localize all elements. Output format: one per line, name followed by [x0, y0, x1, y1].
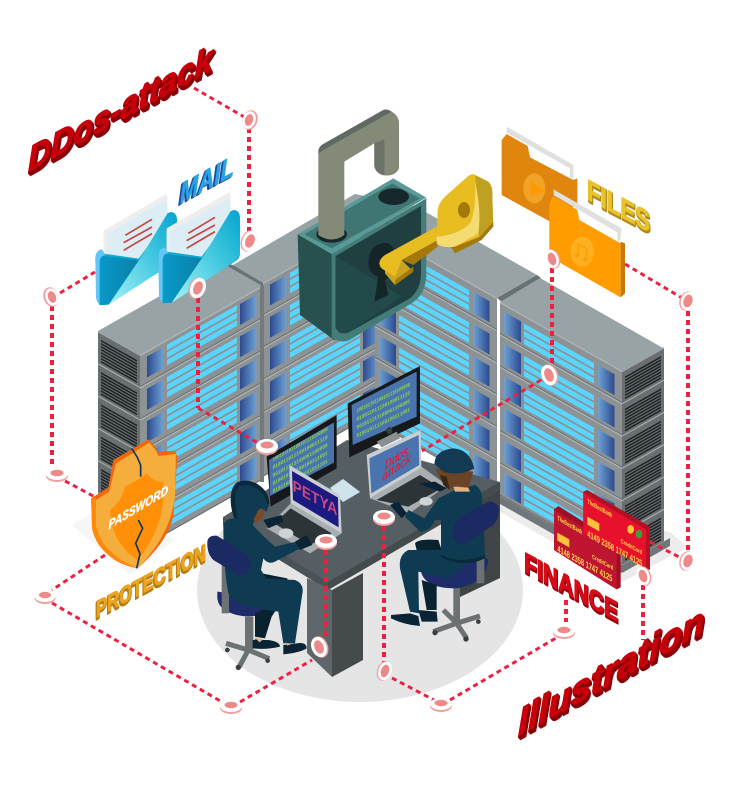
gloves and shoes [253, 515, 312, 654]
rack D [497, 275, 670, 573]
monitor left: 010011011100100011110 [273, 434, 328, 471]
padlock left face [298, 234, 335, 341]
card back [554, 506, 621, 589]
laptop PETYA [267, 465, 342, 553]
chair right seat and base [421, 555, 488, 642]
gloves [390, 482, 447, 518]
padlock top [298, 178, 426, 254]
laptop PETYA: PETYA [293, 476, 337, 519]
dotted connectors [52, 88, 688, 702]
face [253, 509, 265, 523]
chair back right [453, 502, 499, 544]
label: FILES: FILES [587, 173, 650, 239]
ankles [255, 638, 292, 646]
monitor left: 010110011010011011101 [273, 458, 328, 495]
label: MAIL: MAIL [180, 149, 234, 211]
neck [453, 487, 470, 492]
pin faces [34, 109, 698, 712]
torso right [405, 485, 485, 564]
desk right pillar [455, 482, 500, 597]
shield cracks [132, 448, 143, 568]
label: PROTECTION: PROTECTION [96, 539, 206, 624]
hacker right with chair [390, 448, 499, 642]
front leg [400, 550, 468, 613]
floor: grey ellipse [197, 478, 523, 702]
monitor left [267, 415, 337, 507]
connector pins [34, 108, 698, 714]
rack C [355, 194, 537, 492]
pin rims [34, 108, 697, 714]
rack A [98, 262, 264, 549]
card front: TheBestBank [587, 497, 612, 520]
card front: 4149 2358 1747 4125 [587, 529, 643, 570]
mail envelopes [95, 193, 240, 305]
key [379, 174, 493, 285]
keyhole [368, 243, 397, 302]
laptop Ddos: attack [382, 449, 412, 484]
back leg and thigh [415, 540, 442, 610]
monitor right: 010011011100100011110 [357, 389, 410, 423]
card front [583, 490, 650, 570]
card back: CreditCard [592, 554, 613, 572]
card back: TheBestBank [557, 514, 582, 536]
heading: Illustration: Illustration [518, 597, 704, 744]
lower back leg [255, 602, 282, 638]
folders [502, 127, 625, 297]
floor: shield platform [72, 502, 175, 575]
server racks [98, 194, 670, 573]
envelope front [158, 193, 240, 303]
desk [223, 440, 500, 677]
padlock [298, 109, 493, 341]
monitor right: 100101101100101110100000 [357, 381, 410, 415]
monitor left: 010010111100100111001 [273, 450, 328, 487]
monitor right: 010010111100100111001 [357, 406, 410, 440]
pin centres [39, 113, 694, 708]
laptop Ddos: Ddos [385, 442, 408, 473]
monitor left: 001011213100061100000 [273, 442, 328, 479]
diagonal connectors [52, 88, 682, 702]
body left [223, 481, 303, 643]
folder: video [502, 127, 577, 223]
folder: music [549, 189, 625, 297]
padlock front face [332, 198, 426, 341]
monitor right: 001011213100061100000 [357, 398, 410, 431]
collar [441, 555, 485, 563]
desk front pillar left face [307, 578, 332, 677]
padlock shackle [318, 109, 399, 239]
monitor left: 100101101100101110100000 [273, 426, 328, 463]
rack B [233, 194, 395, 477]
chair back left [207, 536, 250, 575]
chair left seat and base [217, 565, 282, 670]
monitor right [348, 366, 420, 457]
card back: 4148 2358 1747 4125 [557, 544, 613, 585]
heading: DDos-attack: DDos-attack [28, 36, 214, 179]
shield [91, 439, 177, 568]
card front: CreditCard [621, 538, 642, 556]
credit cards [554, 490, 650, 589]
hair and beard [435, 468, 473, 490]
laptop Ddos [367, 430, 447, 513]
label: PASSWORD: PASSWORD [109, 483, 168, 532]
desk top [223, 440, 500, 590]
monitors and laptops [267, 366, 447, 553]
label: FINANCE: FINANCE [524, 547, 618, 628]
small keyboard [330, 479, 360, 502]
vertical connectors [52, 128, 688, 662]
cap [434, 448, 474, 474]
envelope back [95, 195, 177, 305]
desk front pillar right face [332, 573, 363, 677]
floor: rack platform [497, 500, 688, 582]
hacker left with chair [207, 481, 312, 670]
hood edge [231, 481, 269, 518]
shoes right [391, 610, 438, 626]
